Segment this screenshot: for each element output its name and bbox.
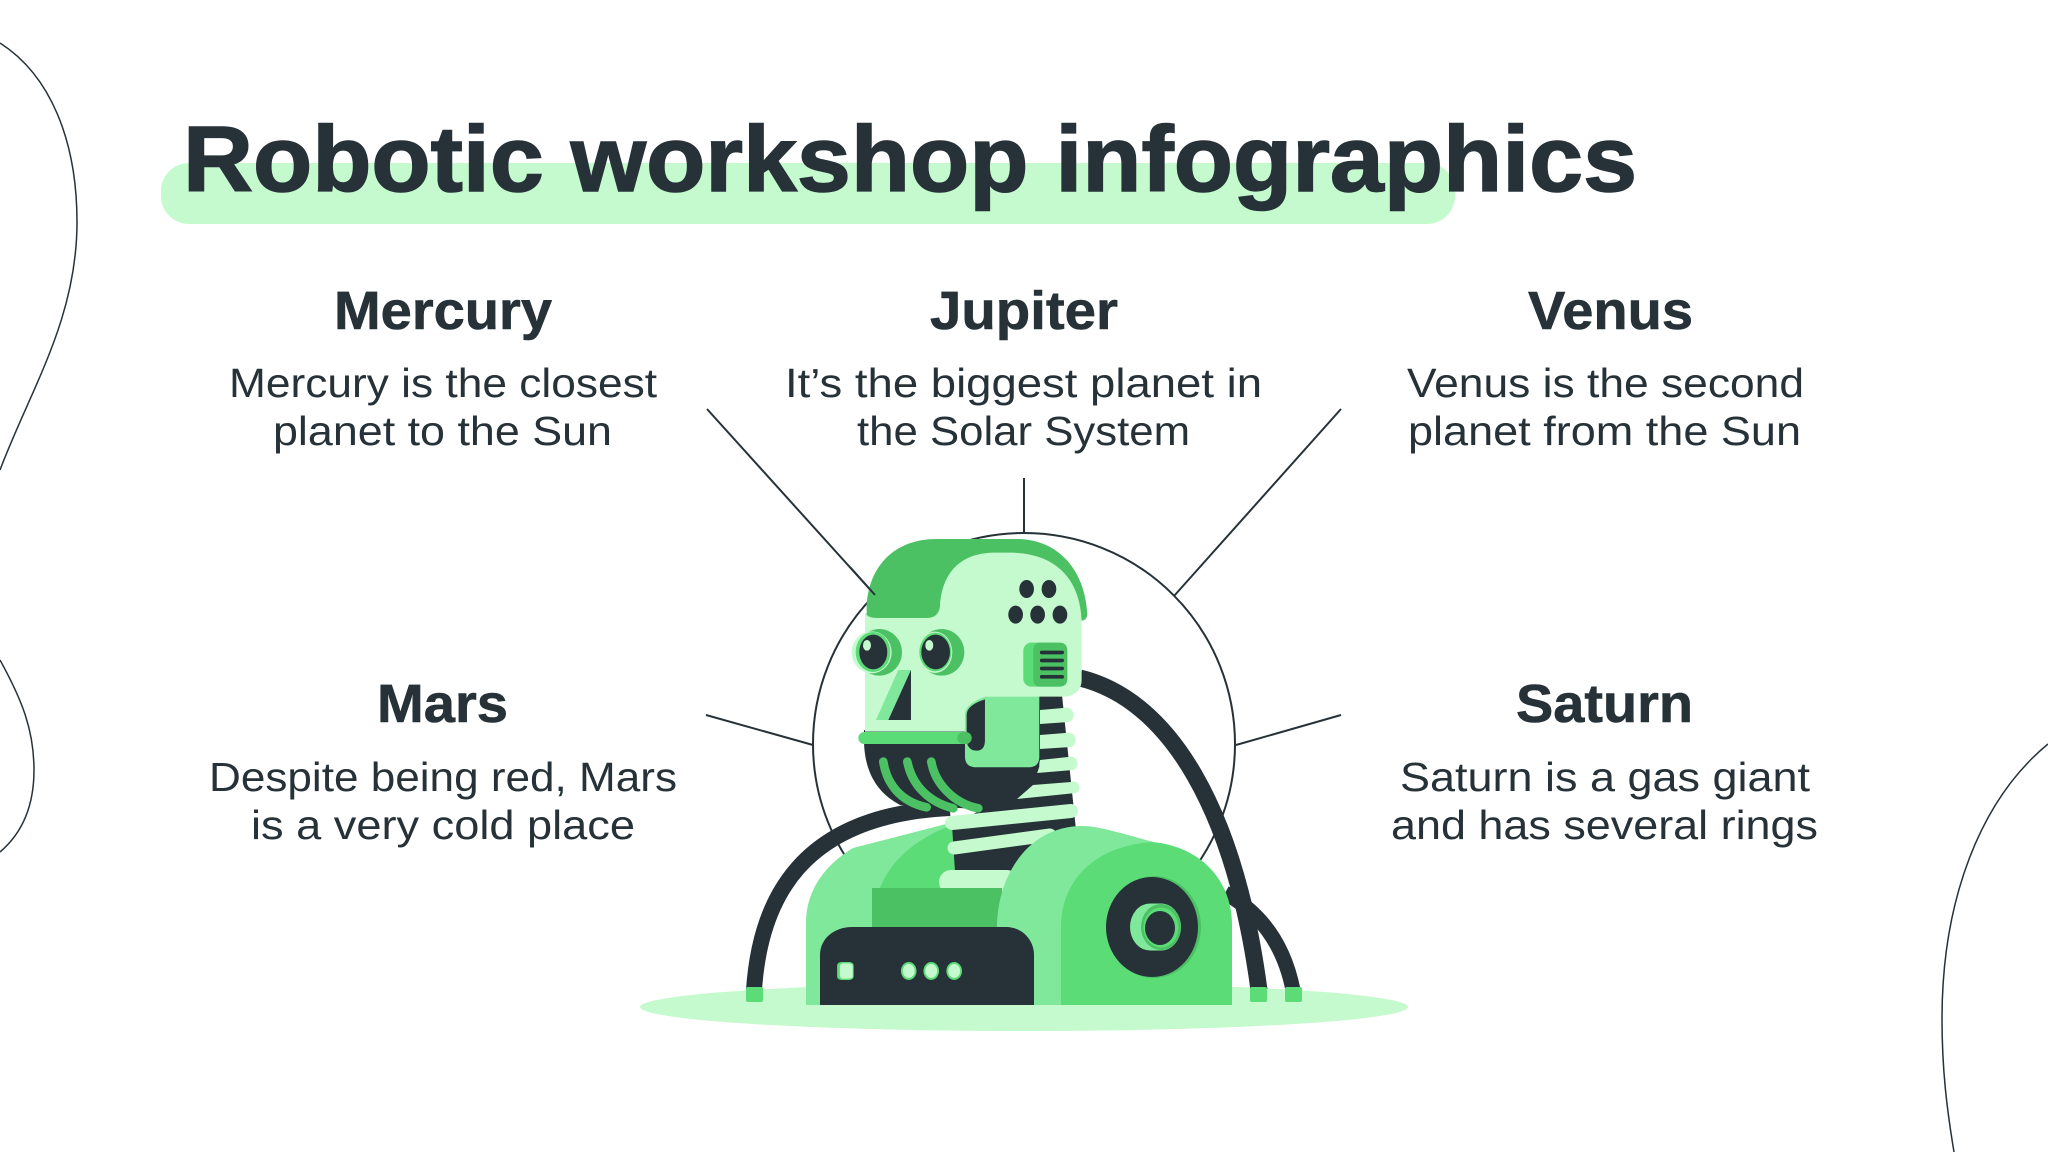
text block: Saturn: Saturn is a gas giant (1400, 754, 1811, 800)
base indicator lights (837, 962, 962, 980)
text block: Jupiter: the Solar System (857, 408, 1190, 454)
cable: left arm (754, 808, 950, 990)
text block: Mercury: Mercury is the closest (229, 360, 658, 406)
text block: Jupiter (785, 281, 1262, 454)
text block: Mercury (229, 281, 658, 454)
right eye (918, 629, 964, 676)
robot illustration (746, 539, 1302, 1005)
cable: right short (1225, 893, 1293, 990)
text block: Mercury: planet to the Sun (273, 408, 612, 454)
base camera lens (1106, 876, 1201, 978)
text block: Mars: Despite being red, Mars (209, 754, 677, 800)
jaw and beard (864, 730, 1039, 809)
text block: Saturn (1391, 674, 1818, 848)
forehead dots (1008, 580, 1067, 624)
robot base body (820, 826, 1232, 1005)
text block: Saturn: Saturn (1516, 674, 1693, 734)
text block: Jupiter: It’s the biggest planet in (785, 360, 1262, 406)
Mercury connector tip over hair (850, 567, 875, 595)
robot base left hump (806, 823, 1010, 1005)
text block: Mars (209, 674, 677, 848)
nose (876, 670, 911, 720)
text block: Mars: is a very cold place (251, 802, 635, 848)
text block: Mercury: Mercury (334, 281, 552, 341)
text block: Mars: Mars (377, 674, 508, 734)
robot head (852, 539, 1087, 809)
text block: Venus: Venus is the second (1407, 360, 1804, 406)
floor shadow ellipse (640, 983, 1408, 1031)
ear vent (1023, 643, 1067, 687)
cable: right arm (1080, 678, 1259, 990)
hair cap (867, 539, 1087, 621)
face (865, 552, 1082, 732)
mustache bar (858, 732, 972, 744)
title: Robotic workshop infographics (183, 107, 1637, 211)
text block: Venus: Venus (1528, 281, 1693, 341)
left eye (852, 629, 902, 676)
text block: Venus: planet from the Sun (1408, 408, 1801, 454)
cable tips (746, 987, 1302, 1002)
text block: Venus (1407, 281, 1804, 454)
text block: Jupiter: Jupiter (930, 281, 1118, 341)
mouth gap (967, 699, 985, 751)
cheek plate (965, 697, 1039, 767)
connector lines and circle (706, 409, 1341, 955)
title highlight (161, 163, 1455, 224)
text block: Saturn: and has several rings (1391, 802, 1818, 848)
robot neck (952, 695, 1080, 872)
